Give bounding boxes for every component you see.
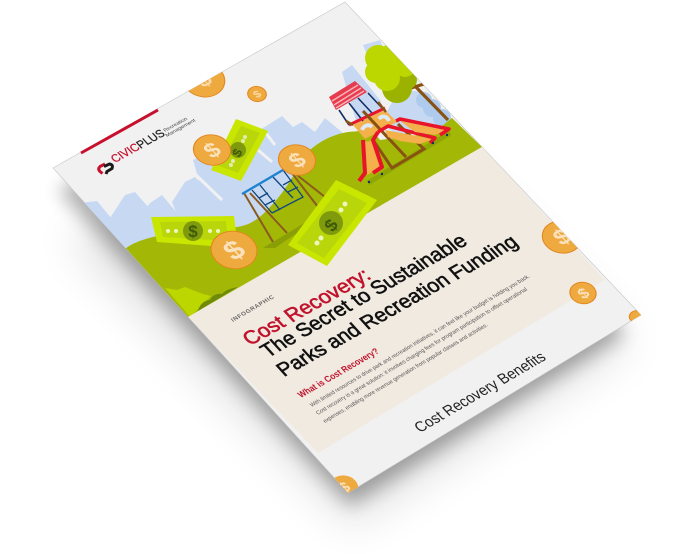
coin: $ xyxy=(198,137,226,163)
bushes xyxy=(165,287,238,317)
coin large: $ xyxy=(217,235,252,267)
coin large xyxy=(210,230,258,270)
subheading: What is Cost Recovery? xyxy=(296,346,382,400)
city skyline xyxy=(80,40,452,255)
coin small: $ xyxy=(251,89,264,101)
logo mark xyxy=(99,164,112,174)
coin xyxy=(278,144,316,176)
bill: large right xyxy=(288,180,377,266)
coin right small: $ xyxy=(574,286,594,303)
logo subtitle xyxy=(162,116,198,138)
coin corner right xyxy=(628,310,641,321)
coin: $ xyxy=(283,147,311,173)
coin right xyxy=(542,222,578,254)
beige content panel xyxy=(188,147,605,453)
eyebrow: INFOGRAPHIC xyxy=(230,295,276,323)
coin right small xyxy=(569,282,597,304)
logo xyxy=(81,110,198,174)
coin small xyxy=(247,86,267,102)
title: Parks and Recreation Funding xyxy=(272,231,523,381)
cloud xyxy=(416,92,451,127)
panel: flyer sheet xyxy=(53,2,648,503)
tree xyxy=(365,44,448,120)
logo bar xyxy=(81,110,158,153)
body text: expenses, enabling more revenue generation from popular classes and activities. xyxy=(322,323,490,424)
logo subtitle: Management xyxy=(164,118,198,138)
body text: With limited resources to drive park and recreation initiatives, it can feel like your budget is holding you back. xyxy=(309,274,532,408)
section heading: Cost Recovery Benefits xyxy=(411,349,550,436)
bill: left xyxy=(151,216,238,248)
logo wordmark: CIVICPLUS xyxy=(108,127,168,165)
title: Cost Recovery: xyxy=(238,264,376,350)
building highlights xyxy=(196,132,275,200)
coin xyxy=(188,72,226,98)
drop shadow xyxy=(58,30,630,525)
coin xyxy=(192,134,232,166)
coin: $ xyxy=(190,67,217,92)
logo subtitle: Recreation xyxy=(162,116,189,133)
bill: top xyxy=(211,119,268,181)
body text: Cost recovery is a great solution: it involves charging fees for program participation to offset operational xyxy=(315,287,529,416)
green lawn xyxy=(118,118,482,317)
playground shadow xyxy=(368,133,450,183)
playground structure xyxy=(329,81,449,183)
bill: large right: $ xyxy=(320,215,342,235)
coin bottom xyxy=(334,475,358,493)
swing set xyxy=(242,167,325,242)
coin right: $ xyxy=(548,224,577,251)
bill: left: $ xyxy=(188,222,198,241)
title: The Secret to Sustainable xyxy=(256,230,472,362)
illustration: park scene xyxy=(80,40,648,503)
swing shadow xyxy=(264,224,304,248)
bill: top: $ xyxy=(229,145,246,160)
coin bottom: $ xyxy=(335,480,355,497)
